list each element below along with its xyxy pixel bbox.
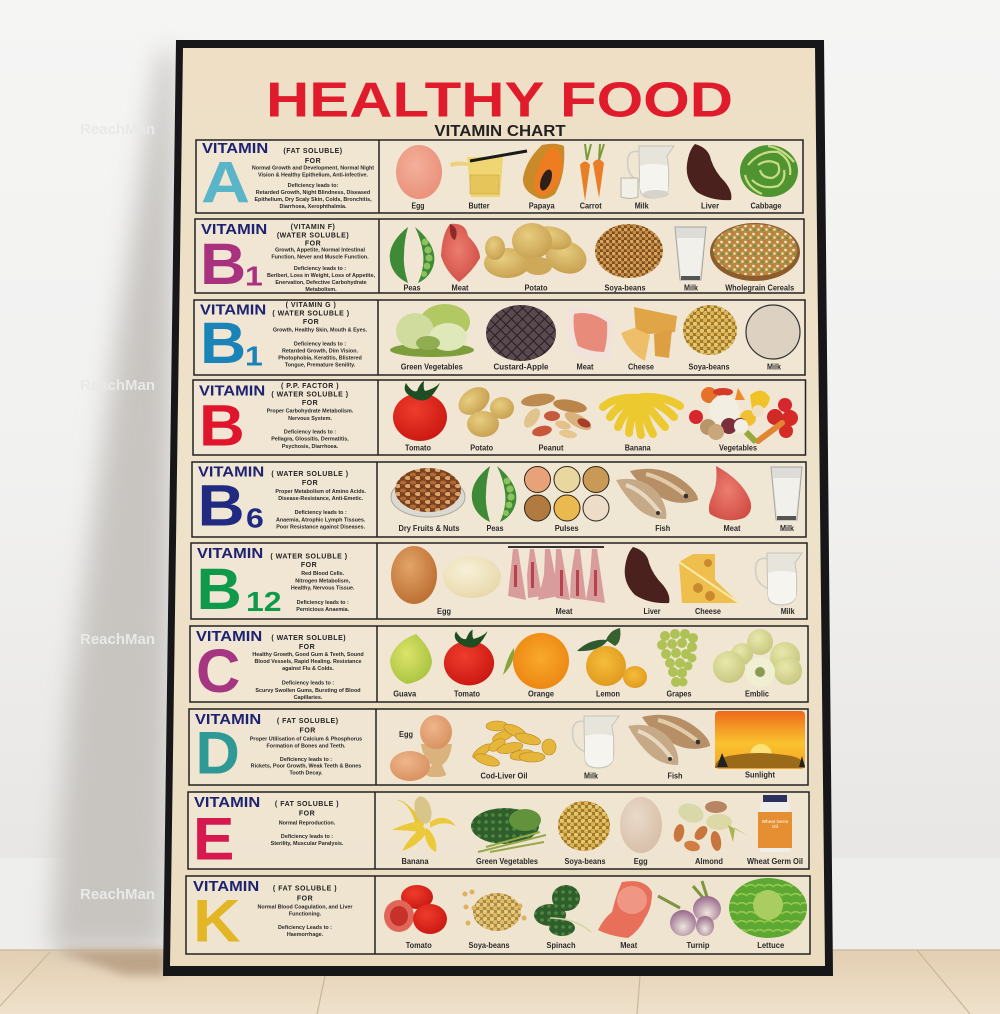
- food: lettuce: Lettuce: [757, 941, 785, 950]
- heading: vitamin B6: 6: [246, 503, 264, 534]
- food: potato: [453, 381, 514, 453]
- heading: vitamin B1: 1: [245, 341, 263, 372]
- food: meat: Meat: [576, 362, 594, 371]
- food: banana: Banana: [402, 857, 429, 866]
- text: vitamin C details: Scurvy Swollen Gums, Bursting of Blood: [255, 688, 361, 694]
- text: vitamin D details: Deficiency leads to :: [280, 757, 332, 763]
- text: vitamin B6 details: Proper Metabolism of Amino Acids.: [275, 489, 367, 495]
- food: almond: [672, 800, 748, 866]
- heading: vitamin B1: [200, 302, 266, 377]
- food: lemon: Lemon: [596, 689, 620, 698]
- food: papaya: [523, 144, 564, 211]
- heading: vitamin B: [199, 383, 265, 458]
- food: milk: [746, 305, 800, 371]
- food: green vegetables: [390, 304, 474, 371]
- text: vitamin B1 details: Function, Never and Muscle Function.: [271, 254, 369, 260]
- text: vitamin C details: Deficiency leads to :: [282, 681, 334, 687]
- heading: vitamin E: [193, 795, 260, 873]
- heading: vitamin B1: VITAMIN: [201, 221, 267, 238]
- heading: vitamin D: VITAMIN: [195, 711, 261, 728]
- text: vitamin A details: Vision & Healthy Epithelium, Anti-infective.: [258, 172, 368, 178]
- food: egg: Egg: [634, 857, 648, 866]
- food: vegetables: [689, 387, 798, 453]
- food: egg: [620, 797, 662, 866]
- text: vitamin C details: ( WATER SOLUBLE): [271, 635, 346, 642]
- food: fish: [616, 469, 698, 533]
- panel: vitamin B (P.P. factor): [193, 380, 806, 458]
- food: soya-beans: [558, 801, 610, 866]
- food: butter: Butter: [468, 202, 490, 211]
- food: tomato: Tomato: [406, 941, 432, 950]
- text: vitamin B12 details: Deficiency leads to :: [297, 600, 349, 606]
- food: cod-liver oil: Cod-Liver Oil: [480, 771, 528, 780]
- text: vitamin B1 details: Enervation, Defective Carbohydrate: [275, 280, 367, 286]
- heading: vitamin C: VITAMIN: [196, 628, 262, 645]
- text: vitamin B details: Nervous System.: [288, 416, 332, 422]
- food: meat: Meat: [452, 284, 469, 293]
- heading: vitamin B12: B: [196, 556, 242, 621]
- food: egg: [396, 145, 442, 211]
- food: meat: Meat: [556, 607, 573, 616]
- text: vitamin C details: FOR: [299, 644, 315, 651]
- heading: vitamin B1: VITAMIN: [200, 302, 266, 318]
- text: vitamin B details: Psychosis, Diarrhoea.: [282, 444, 339, 450]
- food: soya-beans: Soya-beans: [468, 941, 510, 950]
- text: vitamin G details: Photophobia, Keratitis, Blistered: [278, 356, 362, 362]
- heading: vitamin C: [196, 628, 262, 706]
- food: potato: [484, 222, 591, 293]
- food: pulses: Pulses: [555, 524, 579, 533]
- food: egg: Egg: [412, 202, 425, 211]
- subtitle: VITAMIN CHART: [434, 122, 566, 140]
- food: grapes: Grapes: [666, 689, 692, 698]
- text: vitamin D details: Proper Utilisation of Calcium & Phosphorus: [250, 737, 362, 743]
- heading: vitamin B6: VITAMIN: [198, 464, 264, 480]
- food: liver: Liver: [701, 202, 719, 211]
- panel: vitamin B1 (vitamin G): [194, 300, 805, 377]
- food: milk: Milk: [684, 284, 698, 293]
- food: carrot: [580, 144, 604, 211]
- food: lemon: [577, 628, 647, 698]
- text: vitamin G details: Retarded Growth, Dim Vision.: [282, 348, 358, 354]
- title: HEALTHY FOOD: [266, 73, 733, 127]
- panel: vitamin C: [190, 626, 808, 706]
- text: vitamin E details: Deficiency leads to :: [281, 834, 333, 840]
- food: peas: Peas: [404, 284, 421, 293]
- food: milk: Milk: [767, 362, 781, 371]
- food: liver: [625, 547, 669, 616]
- text: vitamin A details: Epithelium, Dry Scaly Skin, Colds, Bronchitis,: [254, 197, 372, 203]
- food: wheat germ oil: Oil: [772, 824, 778, 829]
- heading: vitamin A: VITAMIN: [202, 140, 268, 157]
- food: wholegrain cereals: Wholegrain Cereals: [725, 284, 795, 293]
- heading: vitamin B1: [200, 221, 267, 297]
- watermark: ReachMan: [80, 631, 155, 648]
- food: cheese: Cheese: [695, 607, 721, 616]
- food: guava: [390, 634, 432, 698]
- food: green vegetables: Green Vegetables: [476, 857, 538, 866]
- food: wheat germ oil: [747, 795, 803, 866]
- food: meat: Meat: [724, 524, 741, 533]
- text: vitamin C details: Blood Vessels, Rapid Healing. Resistance: [255, 659, 361, 665]
- panel: vitamin K: [186, 876, 810, 955]
- food: liver: Liver: [644, 607, 660, 616]
- panel: vitamin D: [189, 709, 808, 787]
- text: vitamin B12 details: [270, 553, 355, 613]
- heading: vitamin B1: B: [200, 311, 246, 377]
- text: vitamin E details: FOR: [299, 811, 315, 818]
- watermark: ReachMan: [80, 377, 155, 394]
- food: peas: [390, 227, 434, 293]
- background: baseboard: [0, 858, 1000, 950]
- food: milk: Milk: [584, 771, 598, 780]
- heading: vitamin B6: [198, 464, 264, 539]
- food: spinach: [534, 885, 591, 950]
- food: green vegetables: Green Vegetables: [401, 362, 463, 371]
- food: meat: [567, 306, 613, 371]
- food: lettuce: [729, 878, 807, 950]
- heading: vitamin E: E: [193, 805, 234, 873]
- text: vitamin B6 details: Deficiency leads to :: [295, 510, 347, 516]
- food: tomato: Tomato: [454, 689, 480, 698]
- background: shadow cast by the frame: [50, 52, 176, 950]
- food: fish: Fish: [655, 524, 670, 533]
- text: vitamin A details: (FAT SOLUBLE): [283, 148, 343, 155]
- food: vegetables: Vegetables: [719, 444, 757, 453]
- text: vitamin B1 details: Beriberi, Loss in Weight, Loss of Appetite,: [267, 273, 376, 279]
- food: meat: [709, 466, 751, 533]
- text: vitamin A details: Deficiency leads to:: [288, 183, 339, 189]
- food: tomato: [444, 630, 494, 698]
- text: vitamin B1 details: Metabolism.: [305, 287, 337, 293]
- heading: vitamin E: VITAMIN: [194, 795, 260, 811]
- text: vitamin B6 details: ( WATER SOLUBLE ): [271, 471, 349, 478]
- food: banana: Banana: [625, 444, 651, 453]
- text: vitamin A details: Normal Growth and Development, Normal Night: [252, 166, 374, 172]
- text: vitamin B6 details: FOR: [302, 480, 318, 487]
- heading: vitamin B12: [196, 545, 282, 621]
- food: meat: [598, 881, 652, 950]
- text: vitamin K details: Normal Blood Coagulation, and Liver: [258, 905, 353, 911]
- food: potato: Potato: [470, 444, 493, 453]
- food: cabbage: Cabbage: [750, 202, 782, 211]
- text: vitamin E details: [271, 801, 344, 847]
- food: grapes: [657, 629, 698, 698]
- food: peanut: [520, 392, 594, 453]
- watermark: [80, 121, 155, 903]
- text: vitamin B1 details: FOR: [305, 240, 321, 248]
- heading: vitamin D: [195, 711, 261, 787]
- food: cod-liver oil: [471, 721, 556, 780]
- text: vitamin B details: ( P.P. FACTOR ): [281, 383, 339, 390]
- food: soya-beans: Soya-beans: [564, 857, 606, 866]
- panel: vitamin B12: [191, 543, 807, 621]
- food: milk: [771, 467, 802, 533]
- food: green vegetables: [471, 808, 546, 866]
- background: floor shadow: [55, 950, 166, 975]
- food: pulses: [524, 466, 609, 533]
- heading: vitamin B1: 1: [245, 261, 263, 292]
- heading: vitamin A: [201, 140, 268, 216]
- text: vitamin K details: ( FAT SOLUBLE ): [273, 886, 337, 893]
- food: cabbage: [740, 145, 798, 211]
- text: vitamin C details: Capillaries.: [294, 695, 323, 701]
- heading: vitamin K: VITAMIN: [193, 878, 259, 895]
- food: wheat germ oil: Wheat Germ: [762, 819, 788, 824]
- text: vitamin B12 details: Red Blood Cells.: [301, 571, 345, 577]
- heading: vitamin B12: VITAMIN: [197, 545, 263, 562]
- text: vitamin K details: [258, 886, 353, 938]
- heading: vitamin B: VITAMIN: [199, 383, 265, 399]
- food: milk: [756, 553, 802, 616]
- food: cheese: [679, 554, 739, 616]
- text: vitamin B12 details: Healthy, Nervous Tissue.: [291, 585, 355, 591]
- food: milk: [573, 716, 619, 780]
- food: soya-beans: Soya-beans: [688, 362, 730, 371]
- food: peas: [472, 466, 516, 533]
- food: soya-beans: Soya-beans: [604, 284, 646, 293]
- food: meat: [441, 224, 480, 293]
- heading: vitamin B6: B: [198, 473, 245, 539]
- text: vitamin G details: ( VITAMIN G ): [286, 302, 336, 309]
- text: vitamin G details: Deficiency leads to :: [294, 342, 346, 348]
- food: emblic: Emblic: [745, 689, 770, 698]
- heading: vitamin D: D: [196, 719, 240, 787]
- text: vitamin E details: Normal Reproduction.: [279, 820, 336, 826]
- text: vitamin B1 details: (WATER SOLUBLE): [277, 232, 349, 240]
- food: meat: Meat: [620, 941, 638, 950]
- text: vitamin B details: FOR: [302, 400, 318, 407]
- text: vitamin D details: Formation of Bones and Teeth.: [267, 744, 346, 750]
- heading: vitamin K: K: [193, 888, 241, 955]
- text: vitamin B12 details: ( WATER SOLUBLE ): [270, 553, 348, 560]
- food: wholegrain cereals: [710, 223, 800, 293]
- food: peanut: Peanut: [538, 444, 564, 453]
- watermark: ReachMan: [80, 121, 155, 138]
- text: vitamin G details: Growth, Healthy Skin, Mouth & Eyes.: [273, 328, 368, 334]
- text: vitamin B6 details: Anaemia, Atrophic Lymph Tissues.: [276, 517, 366, 523]
- food: cheese: [621, 307, 677, 371]
- food: potato: Potato: [524, 284, 548, 293]
- text: vitamin D details: FOR: [300, 728, 316, 735]
- food: banana: [603, 397, 680, 453]
- text: vitamin B1 details: Deficiency leads to :: [294, 266, 346, 272]
- food: soya-beans: [683, 305, 737, 371]
- food: custard-apple: [486, 305, 556, 371]
- food: egg in cup: [390, 715, 452, 781]
- text: vitamin E details: ( FAT SOLUBLE ): [275, 801, 339, 808]
- food: peas: Peas: [486, 524, 504, 533]
- food: spinach: Spinach: [546, 941, 576, 950]
- panel: vitamin B1 (vitamin F): [195, 219, 804, 297]
- text: vitamin B12 details: Nitrogen Metabolism,: [295, 578, 351, 584]
- food: carrot: Carrot: [580, 202, 602, 211]
- text: vitamin B1 details: [267, 224, 376, 293]
- food: turnip: Turnip: [686, 941, 710, 950]
- text: vitamin K details: Functioning.: [289, 912, 322, 918]
- food: turnip: [658, 881, 721, 950]
- text: vitamin B12 details: Pernicious Anaemia.: [296, 607, 350, 613]
- heading: vitamin A: A: [201, 150, 250, 216]
- heading: vitamin K: [193, 878, 259, 955]
- text: vitamin C details: [252, 635, 364, 701]
- text: vitamin G details: ( WATER SOLUBLE ): [272, 310, 350, 318]
- text: vitamin B details: Pellagra, Glossitis, Dermatitis,: [271, 437, 349, 443]
- food: milk: Milk: [635, 202, 649, 211]
- text: vitamin A details: [252, 148, 374, 210]
- text: vitamin K details: FOR: [297, 895, 313, 902]
- food: fish: [628, 715, 710, 780]
- text: vitamin D details: [250, 718, 362, 777]
- text: vitamin B6 details: [271, 471, 367, 530]
- food: sunlight: Sunlight: [745, 771, 775, 780]
- food: milk: Milk: [781, 607, 795, 616]
- food: guava: Guava: [393, 689, 417, 698]
- food: emblic: [713, 629, 802, 698]
- food: orange: [503, 633, 569, 698]
- text: vitamin B details: Proper Carbohydrate Metabolism.: [267, 409, 354, 415]
- food: custard-apple: Custard-Apple: [494, 362, 549, 371]
- text: vitamin C details: against Flu & Colds.: [282, 666, 334, 672]
- text: vitamin B details: ( WATER SOLUBLE ): [271, 392, 349, 399]
- food: egg: Egg: [437, 607, 451, 616]
- text: vitamin K details: Haemorrhage.: [287, 932, 324, 938]
- text: vitamin D details: ( FAT SOLUBLE): [277, 718, 339, 725]
- food: sunlight: [715, 711, 805, 780]
- text: vitamin B6 details: Poor Resistance against Diseases.: [276, 524, 366, 530]
- panel: vitamin B6: [192, 462, 806, 539]
- panel: vitamin E: [188, 792, 809, 873]
- text: vitamin K details: Deficiency Leads to :: [278, 925, 332, 931]
- food: tomato: [393, 381, 447, 453]
- text: vitamin C details: Healthy Growth, Good Gum & Teeth, Sound: [252, 652, 364, 658]
- text: vitamin G details: Tongue, Premature Senility.: [285, 362, 356, 368]
- food: egg in cup: Egg: [399, 730, 413, 739]
- food: milk: Milk: [780, 524, 794, 533]
- food: soya-beans: [462, 890, 526, 950]
- text: vitamin D details: Rickets, Poor Growth, Weak Teeth & Bones: [251, 764, 361, 770]
- text: vitamin G details: FOR: [303, 319, 319, 326]
- text: vitamin B12 details: FOR: [301, 562, 317, 569]
- text: vitamin B1 details: (VITAMIN F): [291, 224, 335, 231]
- text: vitamin B details: Deficiency leads to :: [284, 430, 336, 436]
- heading: vitamin B: B: [199, 393, 245, 458]
- food: wheat germ oil: Wheat Germ Oil: [747, 857, 803, 866]
- text: vitamin B details: [267, 383, 354, 450]
- food: tomato: [384, 885, 447, 950]
- poster frame: [163, 40, 833, 976]
- food: fish: Fish: [668, 771, 683, 780]
- food: soya-beans: [595, 224, 663, 293]
- food: tomato: Tomato: [405, 444, 431, 453]
- text: vitamin A details: Retarded Growth, Night Blindness, Diseased: [256, 190, 370, 196]
- text: vitamin E details: Sterility, Muscular Paralysis.: [271, 841, 344, 847]
- text: vitamin G details: [272, 302, 368, 368]
- panel: vitamin A: [196, 140, 803, 216]
- food: banana: [392, 794, 456, 866]
- food: butter: [450, 151, 527, 211]
- text: vitamin B6 details: Disease-Resistance, Anti-Emetic.: [278, 496, 364, 502]
- text: vitamin B1 details: Growth, Appetite, Normal Intestinal: [275, 248, 365, 254]
- heading: vitamin C: C: [196, 637, 240, 706]
- heading: vitamin B1: B: [200, 231, 246, 297]
- watermark: ReachMan: [80, 886, 155, 903]
- food: milk: [621, 146, 674, 211]
- food: liver: [687, 144, 731, 211]
- background: floor: [0, 950, 1000, 1014]
- text: vitamin A details: Diarrhoea, Xerophthalmia.: [279, 204, 347, 210]
- heading: vitamin B12: 12: [246, 587, 282, 618]
- text: vitamin D details: Tooth Decay.: [289, 771, 323, 777]
- poster paper: [170, 48, 825, 966]
- food: almond: Almond: [695, 857, 723, 866]
- food: egg: [391, 546, 501, 616]
- food: dry fruits and nuts: Dry Fruits & Nuts: [398, 524, 460, 533]
- food: papaya: Papaya: [529, 202, 555, 211]
- food: dry fruits and nuts: [391, 468, 465, 533]
- food: meat: [508, 547, 605, 616]
- text: vitamin A details: FOR: [305, 158, 321, 165]
- food: milk: [675, 227, 706, 293]
- food: cheese: Cheese: [628, 362, 654, 371]
- food: orange: Orange: [528, 689, 555, 698]
